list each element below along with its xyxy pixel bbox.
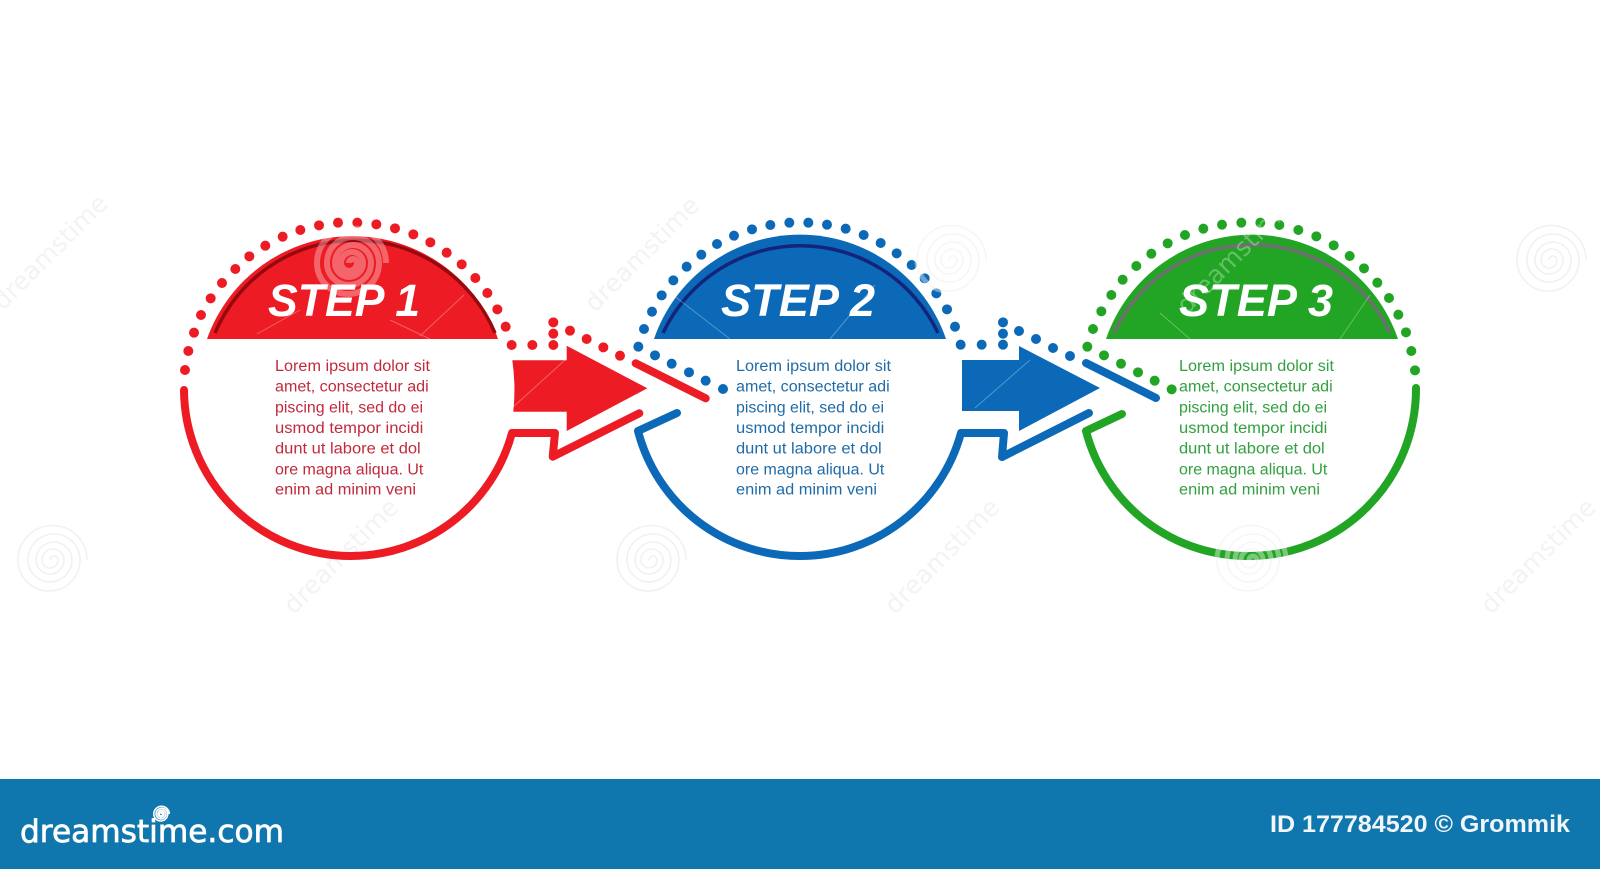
step 3 dotted arc xyxy=(1087,223,1415,389)
step 3 text block: dunt ut labore et dol xyxy=(1179,441,1325,458)
step 1 text block: amet, consectetur adi xyxy=(275,379,429,396)
step 3 heading cap: STEP 3 xyxy=(1179,275,1333,326)
step 3 heading cap xyxy=(1106,235,1398,339)
background watermark marks: dreamstime xyxy=(278,493,404,619)
step 1 arrow upper bar xyxy=(636,363,706,398)
footer bar xyxy=(0,779,1600,869)
step 2 text block: usmod tempor incidi xyxy=(736,420,884,437)
step 3 group (green) xyxy=(1086,223,1416,556)
step 3 text block: piscing elit, sed do ei xyxy=(1179,399,1327,416)
step 2 heading cap: STEP 2 xyxy=(721,275,875,326)
step 2 text block: Lorem ipsum dolor sit xyxy=(736,358,892,375)
step 2 circle outline and lower arrow edge xyxy=(638,413,1089,556)
step 1 text block: Lorem ipsum dolor sit xyxy=(275,358,431,375)
step 1 text block: usmod tempor incidi xyxy=(275,420,423,437)
step 1 text block: ore magna aliqua. Ut xyxy=(275,461,424,478)
overlay watermark marks: dreamstime xyxy=(1171,193,1297,319)
step 1 dotted arc xyxy=(185,223,620,370)
step 3 text block xyxy=(1179,358,1335,498)
step 1 text block xyxy=(275,358,431,498)
step 2 arrow upper bar xyxy=(1086,363,1156,398)
background watermark marks: dreamstime xyxy=(579,191,705,317)
step 2 arrow xyxy=(962,346,1100,431)
step 3 text block: enim ad minim veni xyxy=(1179,482,1320,498)
footer image id and credit: ID 177784520 © Grommik xyxy=(1270,811,1571,838)
step 2 text block xyxy=(736,358,892,498)
step 1 text block: piscing elit, sed do ei xyxy=(275,399,423,416)
step 2 text block: enim ad minim veni xyxy=(736,482,877,498)
step 2 text block: dunt ut labore et dol xyxy=(736,441,882,458)
step 1 arrow xyxy=(512,346,647,431)
step 1 heading cap xyxy=(207,236,498,339)
step 2 text block: amet, consectetur adi xyxy=(736,379,890,396)
step 3 circle outline xyxy=(1086,388,1416,556)
step 2 group (blue) xyxy=(638,223,1156,556)
overlay watermark marks xyxy=(257,193,1370,591)
step 1 heading cap: STEP 1 xyxy=(268,275,420,326)
step 3 text block: usmod tempor incidi xyxy=(1179,420,1327,437)
step 2 dotted arc xyxy=(638,223,1070,389)
background watermark marks xyxy=(0,189,1600,619)
step 1 text block: dunt ut labore et dol xyxy=(275,441,421,458)
step 1 text block: enim ad minim veni xyxy=(275,482,416,498)
step 2 text block: ore magna aliqua. Ut xyxy=(736,461,885,478)
background watermark marks: dreamstime xyxy=(1475,493,1600,619)
step 3 text block: amet, consectetur adi xyxy=(1179,379,1333,396)
footer logo spiral xyxy=(154,806,169,821)
step 2 text block: piscing elit, sed do ei xyxy=(736,399,884,416)
step 1 group (red) xyxy=(184,223,706,556)
step 3 text block: Lorem ipsum dolor sit xyxy=(1179,358,1335,375)
step 1 circle outline and lower arrow edge xyxy=(184,390,639,556)
step 3 text block: ore magna aliqua. Ut xyxy=(1179,461,1328,478)
background watermark marks: dreamstime xyxy=(879,493,1005,619)
step 2 heading cap xyxy=(654,235,946,339)
footer logo wordmark: dreamstime.com xyxy=(20,814,284,850)
